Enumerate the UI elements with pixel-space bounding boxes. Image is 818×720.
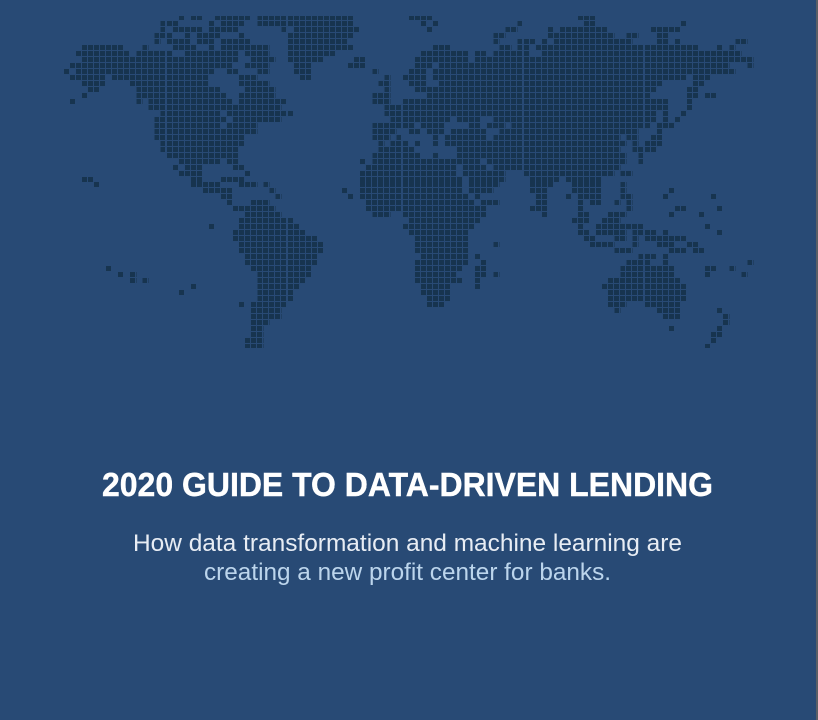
subtitle line two: creating a new profit center for banks. [204, 559, 611, 586]
title: 2020 GUIDE TO DATA-DRIVEN LENDING [102, 466, 713, 503]
right edge strip [816, 0, 818, 720]
subtitle line one: How data transformation and machine learning are [133, 530, 682, 557]
dotted world map [0, 16, 818, 350]
